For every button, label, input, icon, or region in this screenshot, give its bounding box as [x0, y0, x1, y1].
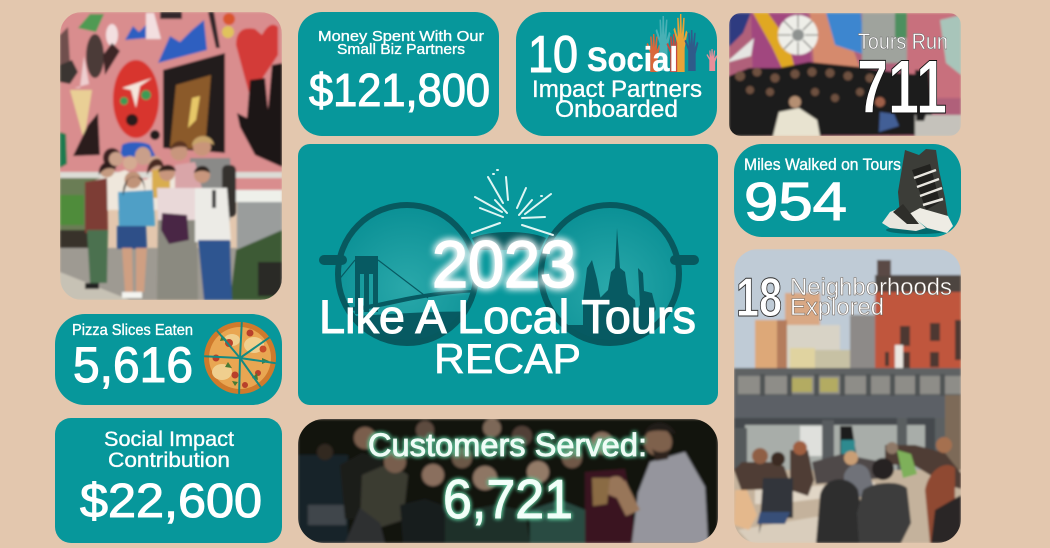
neighborhoods label: Explored [790, 294, 884, 321]
contribution value: $22,600 [80, 475, 262, 528]
pizza slices value: 5,616 [73, 337, 193, 393]
panel: social impact contribution [55, 418, 282, 543]
money spent value: $121,800 [309, 64, 490, 116]
panel: tours run photo [729, 13, 961, 136]
panel: pizza slices eaten [55, 314, 282, 405]
title recap: RECAP [434, 335, 581, 382]
contribution label [104, 428, 234, 472]
icon: fireworks [472, 170, 553, 235]
panel: customers served photo [298, 419, 718, 543]
money spent label: Money Spent With Our [318, 28, 484, 45]
money spent label: Small Biz Partners [337, 41, 465, 58]
neighborhoods label [790, 274, 952, 321]
title name: Like A Local Tours [319, 290, 696, 343]
icon: glasses with NYC skyline [324, 205, 694, 355]
customers served label: Customers Served: [368, 427, 647, 463]
title year: 2023 [432, 227, 576, 301]
icon: pizza [204, 322, 276, 394]
miles label: Miles Walked on Tours [744, 155, 901, 174]
money spent label [318, 28, 484, 58]
contribution label: Contribution [108, 449, 230, 472]
panel: central recap title [298, 144, 718, 405]
neighborhoods count: 18 [736, 266, 782, 328]
pizza slices label: Pizza Slices Eaten [72, 322, 193, 339]
partners label: Onboarded [555, 96, 678, 123]
partners label: Impact Partners [532, 76, 702, 103]
panel: social impact partners onboarded [516, 12, 717, 136]
panel: miles walked on tours [734, 144, 961, 237]
panel: money spent with small biz partners [298, 12, 499, 136]
miles value: 954 [744, 172, 847, 232]
partners count: 10 [528, 26, 578, 84]
panel: neighborhoods explored photo [734, 249, 961, 543]
icon: sneakers [882, 149, 953, 234]
tours run value: 711 [857, 45, 947, 130]
customers served value: 6,721 [443, 468, 573, 530]
partners label [532, 41, 702, 123]
panel: group photo at mural [60, 12, 282, 300]
neighborhoods label: Neighborhoods [790, 274, 952, 301]
contribution label: Social Impact [104, 428, 234, 451]
icon: raised hands [646, 14, 717, 72]
tours run label: Tours Run [858, 29, 948, 54]
partners label: Social [587, 41, 678, 79]
